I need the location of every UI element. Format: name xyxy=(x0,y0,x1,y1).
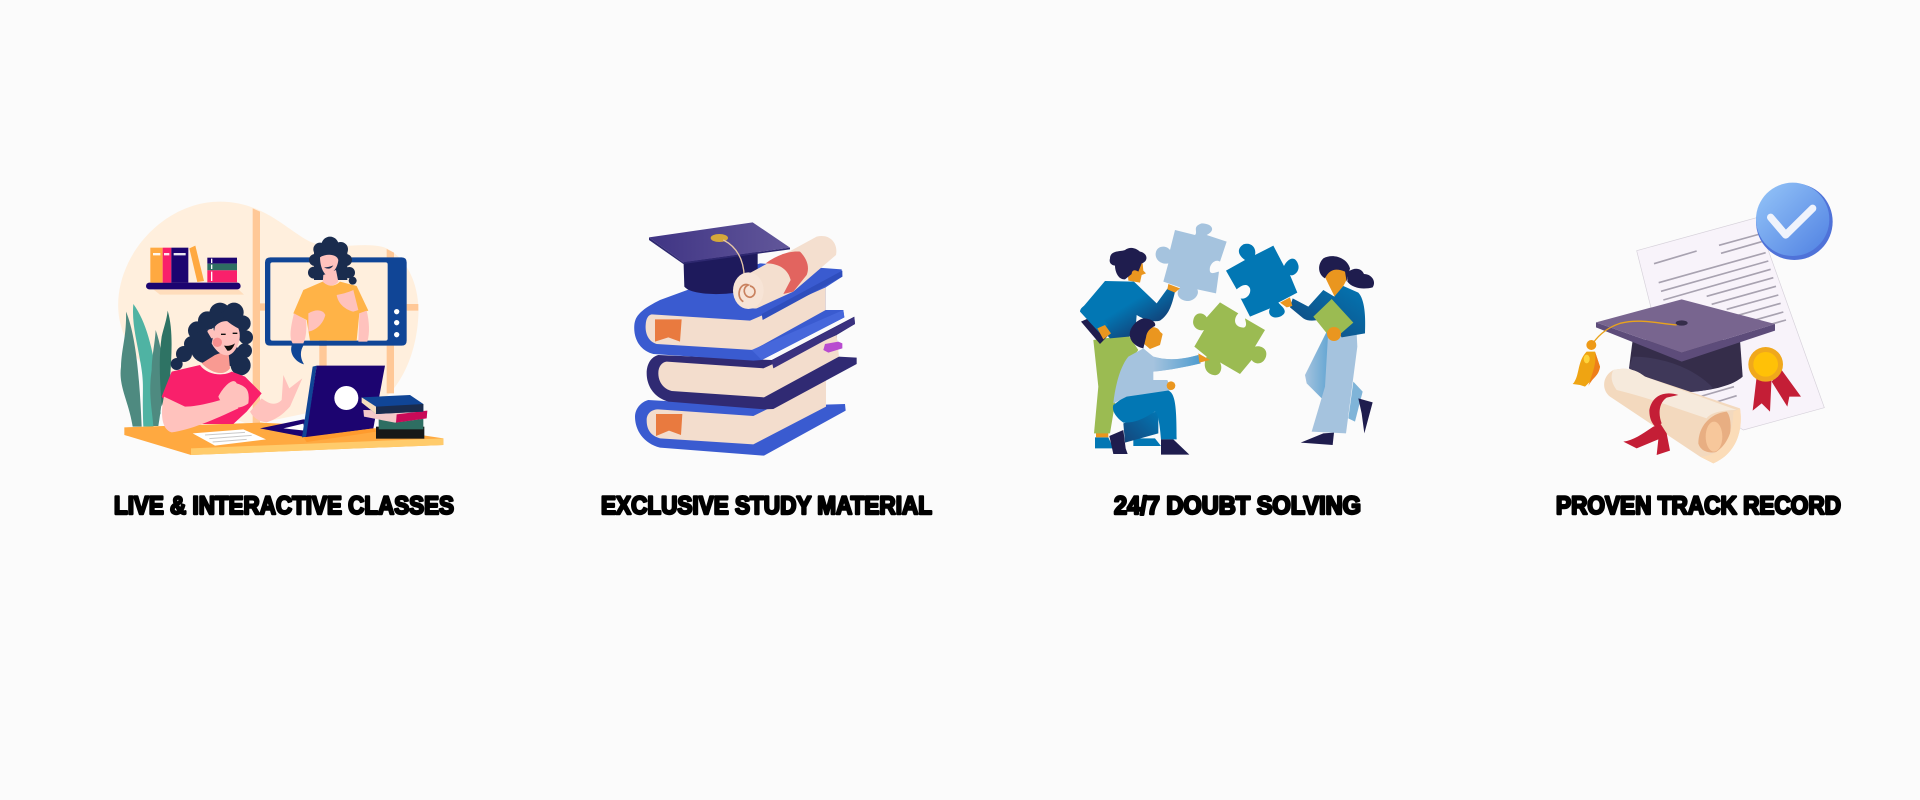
heading: EXCLUSIVE STUDY MATERIAL xyxy=(601,492,932,520)
mortarboard xyxy=(1573,299,1775,392)
crouching man xyxy=(1109,318,1210,455)
stacked books on desk xyxy=(362,395,427,439)
top book xyxy=(634,263,844,361)
student xyxy=(162,303,302,432)
check badge xyxy=(1756,183,1833,260)
illustration: books, cap and scroll xyxy=(634,222,857,456)
paper xyxy=(193,429,266,446)
rolled diploma xyxy=(1604,369,1741,463)
background blob xyxy=(118,202,419,425)
panel: live and interactive classes xyxy=(114,202,454,520)
woman with folder xyxy=(1280,256,1374,445)
heading: PROVEN TRACK RECORD xyxy=(1556,492,1841,520)
desk xyxy=(124,423,443,455)
panel: proven track record xyxy=(1556,183,1841,520)
heading: LIVE & INTERACTIVE CLASSES xyxy=(114,492,454,520)
window frame xyxy=(253,208,418,423)
laptop xyxy=(260,366,385,442)
puzzle piece: green xyxy=(1193,302,1266,375)
heading: 24/7 DOUBT SOLVING xyxy=(1114,492,1361,520)
puzzle piece: blue xyxy=(1226,244,1299,317)
award seal xyxy=(1748,347,1801,412)
puzzle piece: light blue xyxy=(1156,223,1227,301)
illustration: online class xyxy=(118,202,443,455)
presenter on monitor xyxy=(265,237,407,364)
bottom book xyxy=(635,380,846,456)
graduation cap xyxy=(649,222,790,294)
panel: 24/7 doubt solving xyxy=(1080,223,1374,520)
standing man xyxy=(1080,248,1180,448)
diploma scroll xyxy=(733,236,836,309)
shelf with books xyxy=(146,246,244,295)
certificate sheet xyxy=(1637,218,1824,430)
illustration: certificate, cap and diploma xyxy=(1573,183,1833,463)
middle book xyxy=(647,317,857,409)
panel: exclusive study material xyxy=(601,222,932,520)
plant xyxy=(121,304,172,427)
illustration: team solving puzzle xyxy=(1080,223,1374,455)
